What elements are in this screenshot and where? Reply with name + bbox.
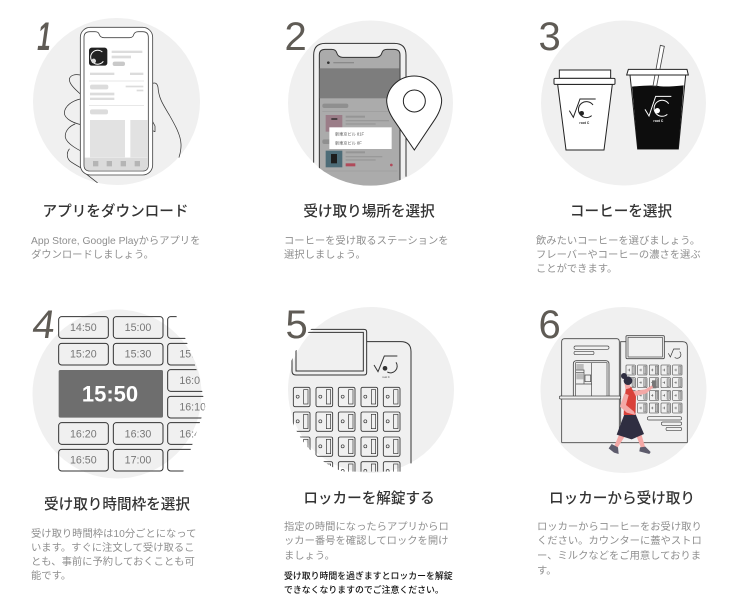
selected time slot: 15:50 bbox=[82, 382, 138, 407]
warning note: できなくなりますのでご注意ください。 bbox=[284, 584, 444, 595]
panel: step 6 pick up from locker bbox=[537, 303, 706, 577]
panel: step 1 download app bbox=[31, 15, 200, 261]
logo bbox=[374, 356, 397, 379]
background circle 5 bbox=[288, 307, 454, 473]
locker body outline bbox=[367, 342, 411, 463]
number 5: 5 bbox=[286, 303, 308, 347]
heading 1: アプリをダウンロード bbox=[43, 202, 188, 220]
time slot buttons: 15:30 bbox=[125, 349, 151, 361]
body text 2: コーヒーを受け取るステーションを bbox=[284, 235, 449, 247]
app store screen bbox=[85, 48, 148, 171]
body text 3: ことができます。 bbox=[536, 262, 617, 275]
woman figure bbox=[609, 373, 653, 454]
panel: step 3 choose coffee bbox=[536, 15, 706, 275]
panel: step 4 choose time slot bbox=[31, 310, 206, 580]
body text 5: ましょう。 bbox=[284, 550, 335, 562]
logo: root C bbox=[382, 375, 390, 379]
number 3: 3 bbox=[538, 15, 561, 59]
background circle 1 bbox=[33, 18, 200, 185]
time slot buttons: 16:10 bbox=[179, 402, 206, 414]
heading 4: 受け取り時間枠を選択 bbox=[44, 495, 190, 513]
time slot buttons bbox=[59, 317, 217, 471]
illustration: time slot grid bbox=[59, 317, 217, 471]
panel: step 2 choose pickup location bbox=[284, 15, 453, 261]
time slot buttons: 16:30 bbox=[125, 428, 151, 440]
body text 3: フレーバーやコーヒーの濃さを選ぶ bbox=[536, 248, 701, 261]
location popup bbox=[329, 127, 392, 149]
body text 4: います。すぐに注文して受け取るこ bbox=[31, 541, 194, 554]
background circle 4 bbox=[32, 310, 202, 478]
location popup: 新東京ビル 8F bbox=[335, 139, 362, 145]
time slot buttons: 16:00 bbox=[179, 375, 206, 387]
background circle 6 bbox=[540, 307, 706, 473]
background circle 3 bbox=[541, 20, 706, 186]
illustration: locker machine bbox=[292, 329, 411, 481]
phone bbox=[80, 27, 153, 175]
iced cup: root C bbox=[653, 119, 664, 123]
time slot buttons: 16:50 bbox=[70, 455, 97, 467]
icon: map pin bbox=[387, 76, 442, 150]
time slot buttons: 17:00 bbox=[125, 455, 151, 467]
heading 6: ロッカーから受け取り bbox=[549, 489, 695, 507]
body text 6: ー、ミルクなどをご用意しておりま bbox=[537, 549, 701, 562]
counter unit bbox=[559, 339, 621, 443]
body text 2: 選択しましょう。 bbox=[284, 248, 366, 261]
body text 1: App Store, Google Playからアプリを bbox=[31, 235, 200, 247]
time slot buttons: 14:50 bbox=[70, 322, 97, 334]
warning note: 受け取り時間を過ぎますとロッカーを解錠 bbox=[284, 570, 453, 581]
body text 6: ください。カウンターに蓋やストロ bbox=[537, 535, 702, 547]
locker doors bbox=[293, 387, 400, 481]
hand bbox=[64, 75, 181, 183]
time slot buttons: 16:40 bbox=[179, 428, 206, 440]
body text 6: す。 bbox=[537, 565, 557, 577]
body text 4: とも、事前に予約しておくことも可 bbox=[31, 555, 195, 568]
body text 1: ダウンロードしましょう。 bbox=[31, 248, 154, 261]
heading 5: ロッカーを解錠する bbox=[303, 490, 435, 507]
body text 4: 受け取り時間枠は10分ごとになって bbox=[31, 527, 196, 540]
body text 5: 指定の時間になったらアプリからロ bbox=[284, 520, 449, 533]
body text 4: 能です。 bbox=[31, 569, 71, 582]
location popup: 新東京ビル 81F bbox=[335, 130, 365, 136]
heading 3: コーヒーを選択 bbox=[570, 203, 672, 220]
phone frame bbox=[314, 43, 406, 177]
background circle 2 bbox=[288, 20, 453, 186]
body text 6: ロッカーからコーヒーをお受け取り bbox=[537, 521, 702, 533]
phone screen bbox=[319, 49, 400, 187]
time slot buttons: 16:20 bbox=[70, 428, 97, 440]
illustration: woman at locker bbox=[559, 336, 687, 454]
time slot buttons: 15:40 bbox=[179, 349, 206, 361]
body text 5: ッカー番号を確認してロックを開け bbox=[284, 534, 448, 547]
heading 2: 受け取り場所を選択 bbox=[303, 202, 435, 220]
illustration: phone in hand bbox=[64, 27, 181, 183]
locker unit bbox=[562, 336, 687, 443]
hot cup: root C bbox=[579, 121, 590, 125]
panel: step 5 unlock locker bbox=[284, 303, 454, 595]
number 4: 4 bbox=[30, 302, 58, 347]
time slot buttons: 15:20 bbox=[70, 349, 97, 361]
body text 3: 飲みたいコーヒーを選びましょう。 bbox=[536, 234, 700, 247]
selected time slot bbox=[59, 370, 163, 418]
number 6: 6 bbox=[538, 303, 561, 347]
time slot buttons: 15:00 bbox=[125, 322, 151, 334]
illustration: phone with location pin bbox=[314, 43, 442, 187]
number 2: 2 bbox=[284, 15, 307, 59]
illustration: coffee cups bbox=[554, 45, 688, 150]
locker screen bbox=[292, 329, 367, 375]
number 1: 1 bbox=[35, 15, 54, 60]
